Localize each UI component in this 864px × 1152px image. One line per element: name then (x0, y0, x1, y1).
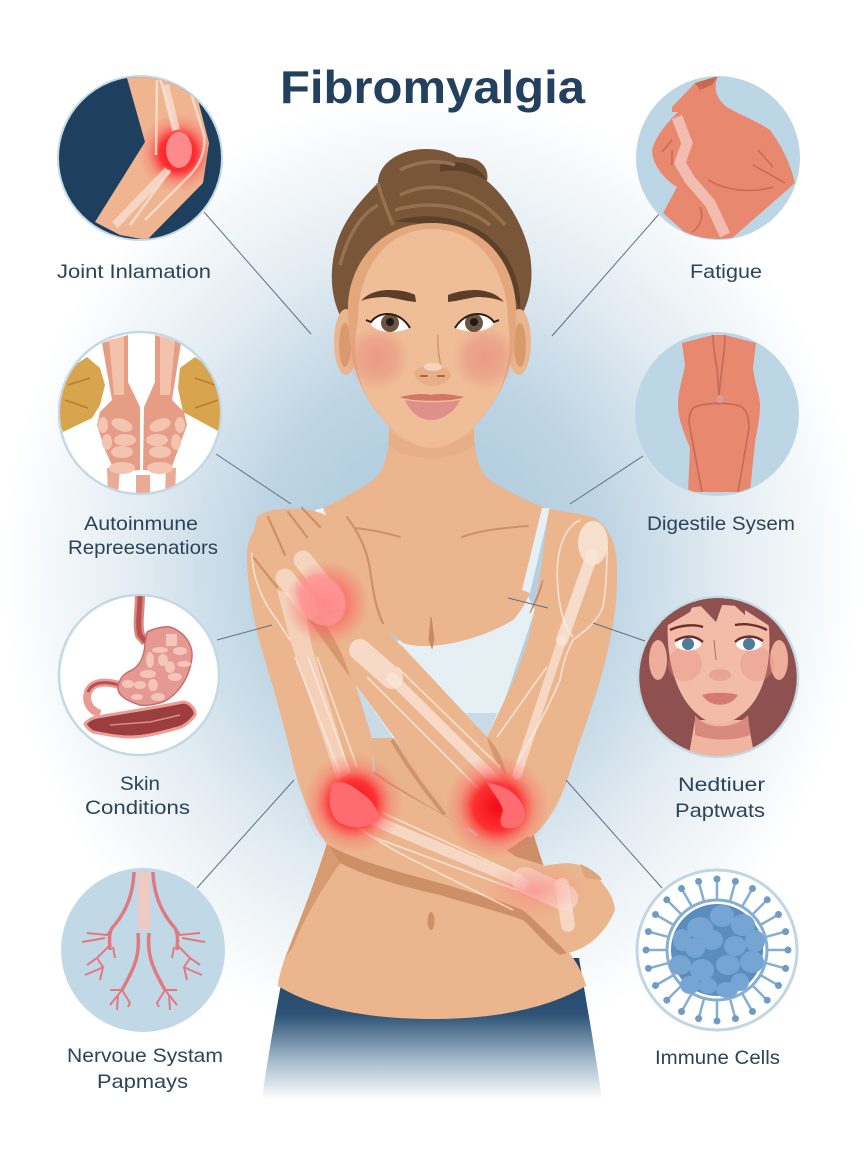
circle 1 (58, 76, 222, 240)
label line 1: Autoinmune (84, 513, 198, 535)
left forearm bone (373, 820, 523, 883)
right forearm shading (296, 580, 507, 778)
circle 2 (636, 76, 800, 240)
cell (646, 879, 788, 1021)
circle 5 (59, 595, 219, 755)
left forearm underside band (328, 845, 567, 955)
joint glow: upper (285, 561, 369, 645)
panel: skin conditions (59, 595, 219, 819)
nerves (82, 872, 205, 1010)
label: Fatigue (690, 261, 762, 283)
belly between arms (370, 738, 470, 830)
circle 8 (637, 870, 797, 1030)
left eye (366, 314, 410, 332)
central figure (247, 149, 617, 1100)
right eyebrow (448, 290, 504, 302)
waist shading right (507, 833, 544, 868)
stomach (85, 595, 195, 737)
panel: digestive (635, 332, 799, 535)
bones (277, 521, 608, 925)
connector lines (197, 212, 662, 888)
arm (95, 74, 218, 240)
nose (414, 335, 451, 386)
label line 2: Repreesenatiors (68, 537, 218, 559)
left ear (334, 309, 358, 375)
face base (348, 223, 516, 448)
circle 4 (635, 332, 799, 496)
navel (428, 912, 434, 930)
armpit crease (530, 580, 543, 613)
hand bones (525, 880, 565, 898)
right ear (507, 309, 531, 375)
thumb (580, 864, 602, 880)
joint glow: wrist (483, 862, 587, 918)
right upper arm bone (562, 555, 592, 640)
panel: neurological (638, 596, 798, 822)
right upper arm bone lower (517, 640, 562, 775)
right strap (522, 508, 550, 593)
right ear inner (514, 323, 526, 367)
left elbow joint bone (330, 782, 380, 827)
right upper arm (487, 509, 617, 838)
label: Immune Cells (655, 1047, 780, 1069)
tendons (252, 520, 607, 910)
humerus head (578, 521, 608, 565)
label: Joint Inlamation (57, 261, 211, 283)
label line 1: Nervoue Systam (67, 1045, 223, 1067)
belly shadow lines (373, 740, 453, 823)
head (332, 149, 531, 448)
label line 1: Nedtiuer (678, 774, 766, 796)
white top (350, 580, 535, 738)
pants (262, 958, 602, 1100)
lower torso (278, 833, 586, 1019)
chest crease (429, 617, 434, 648)
label: Digestile Sysem (647, 513, 795, 535)
left blush (345, 326, 409, 390)
left upper arm bone (277, 590, 350, 780)
right eye (455, 314, 499, 332)
mouth (400, 394, 464, 420)
title: Fibromyalgia (280, 61, 585, 113)
left ear inner (339, 323, 351, 367)
neck and chest (318, 425, 550, 646)
label line 2: Paptwats (675, 800, 765, 822)
hand bone end (562, 885, 568, 925)
panel: fatigue (636, 76, 800, 283)
joint glow: left elbow (303, 753, 403, 853)
collarbones (355, 526, 528, 537)
panel: autoimmune (55, 332, 225, 559)
neck shadow (389, 430, 474, 458)
left strap (315, 508, 342, 552)
circle 6 (638, 597, 798, 757)
torso shape (678, 335, 760, 492)
right elbow joint bone (487, 783, 525, 828)
right forearm (253, 509, 532, 850)
waist shading left (285, 843, 340, 958)
panel: nervous system (61, 868, 225, 1093)
hair highlights (340, 162, 505, 265)
fingers (253, 508, 383, 623)
forearm shaft (392, 678, 505, 790)
top lower band (355, 683, 497, 738)
hands (55, 335, 225, 495)
label line 1: Skin (120, 773, 160, 795)
left arm (247, 525, 615, 953)
left eyebrow (361, 290, 416, 302)
panel: immune cells (637, 870, 797, 1069)
body (652, 76, 795, 240)
face (355, 229, 509, 448)
upper joint bone (289, 566, 355, 634)
hair shading (395, 162, 520, 315)
joint glow: right elbow (445, 755, 549, 859)
portrait (649, 596, 788, 760)
circle 7 (61, 868, 225, 1032)
label line 2: Papmays (97, 1071, 188, 1093)
forearm bone wide end (360, 650, 392, 678)
label line 2: Conditions (85, 797, 190, 819)
circle 3 (59, 332, 221, 494)
hair (332, 149, 531, 325)
right blush (453, 326, 517, 390)
wrist bones upper (285, 560, 335, 610)
panel: joint inflammation (57, 74, 222, 283)
